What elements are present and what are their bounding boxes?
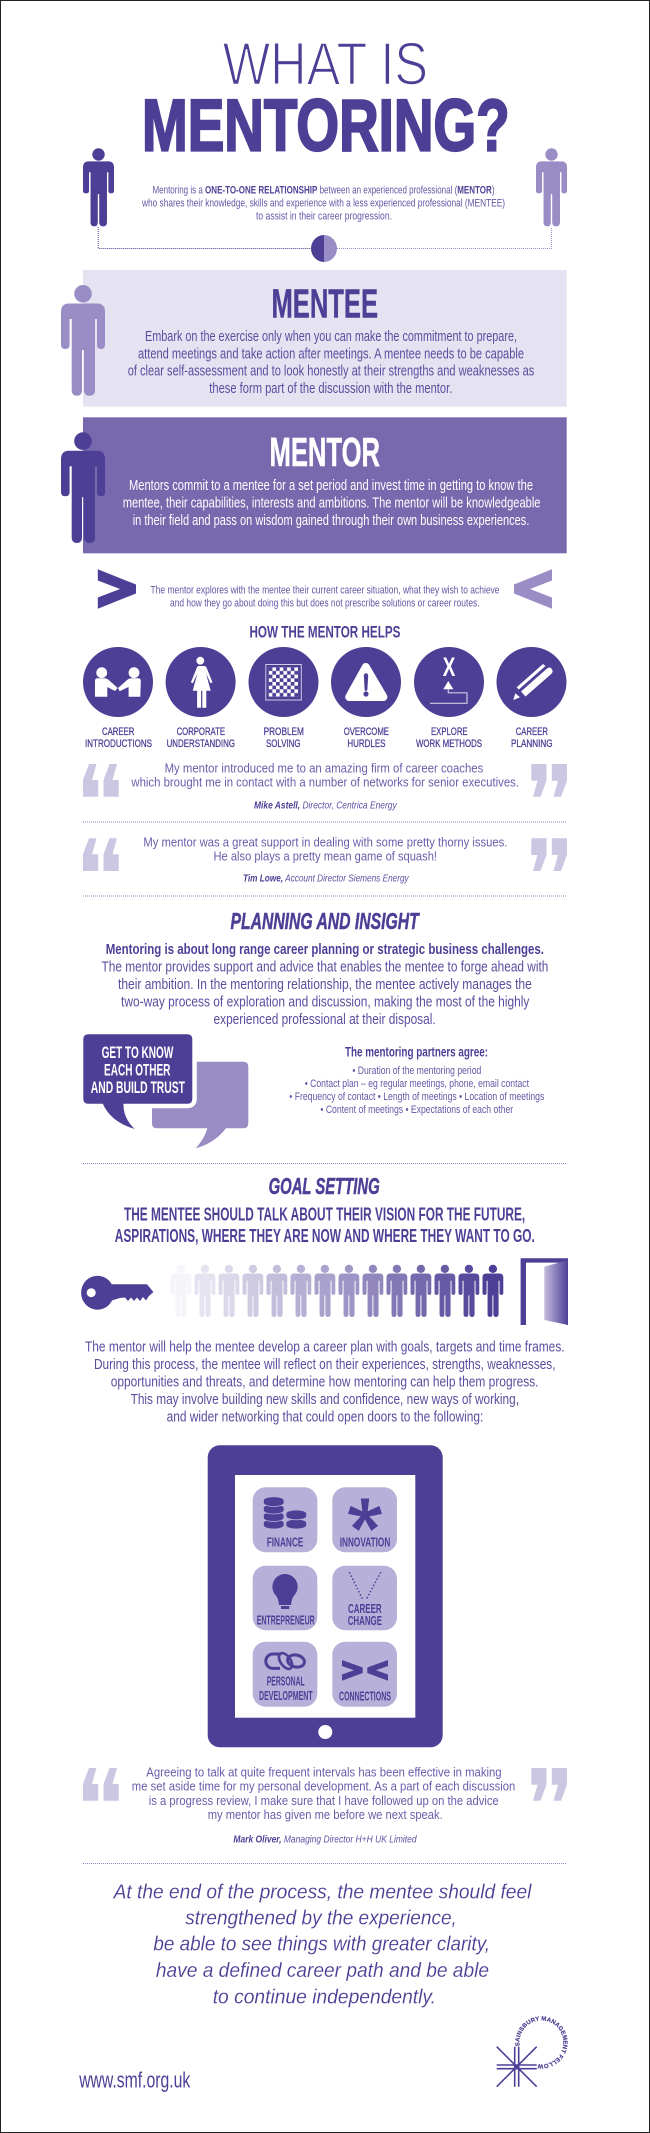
icon: corporate understanding bbox=[166, 647, 236, 717]
quote: Mike Astell: Mike Astell, Director, Centrica Energy bbox=[254, 800, 397, 812]
planning body text: two-way process of exploration and discussion, making the most of the highly bbox=[121, 994, 530, 1011]
goal setting body text: opportunities and threats, and determine how mentoring can help them progress. bbox=[111, 1374, 538, 1391]
labels under mentor help icons: EXPLORE bbox=[431, 726, 468, 738]
figure: mentee small bbox=[536, 148, 567, 226]
mentoring partners agree list: • Frequency of contact • Length of meetings • Location of meetings bbox=[289, 1091, 545, 1103]
tile: career change: CAREER bbox=[348, 1602, 382, 1616]
logo: sainsbury management fellows: SAINSBURY MANAGEMENT FELLOWS bbox=[515, 2016, 568, 2069]
tile: personal development: PERSONAL bbox=[267, 1675, 305, 1689]
explore text: The mentor explores with the mentee their current career situation, what they wish to achieve bbox=[150, 584, 500, 596]
chevron left bbox=[514, 569, 552, 609]
quote: Mark Oliver: me set aside time for my personal development. As a part of each discussion bbox=[132, 1780, 515, 1794]
icon: explore work methods: X bbox=[443, 652, 455, 682]
quote: Tim Lowe bbox=[83, 836, 567, 885]
mentoring partners agree list: The mentoring partners agree: bbox=[345, 1045, 488, 1060]
heading: planning and insight: PLANNING AND INSIGHT bbox=[230, 908, 420, 934]
quote: Mike Astell: My mentor introduced me to an amazing firm of career coaches bbox=[165, 762, 483, 776]
mentoring partners agree list: • Content of meetings • Expectations of each other bbox=[320, 1104, 513, 1116]
heading: how the mentor helps: HOW THE MENTOR HELPS bbox=[250, 623, 400, 642]
tile: finance: FINANCE bbox=[267, 1535, 303, 1549]
closing statement: have a defined career path and be able bbox=[156, 1959, 489, 1982]
quote: Mark Oliver: Agreeing to talk at quite frequent intervals has been effective in making bbox=[146, 1766, 502, 1780]
mentoring partners agree list: • Duration of the mentoring period bbox=[352, 1065, 481, 1077]
tile: innovation: INNOVATION bbox=[340, 1535, 390, 1549]
intro text bbox=[141, 184, 505, 222]
mentor heading: MENTOR bbox=[270, 429, 380, 475]
mentee body text: these form part of the discussion with the mentor. bbox=[209, 380, 452, 397]
speech bubbles: GET TO KNOW bbox=[102, 1043, 174, 1062]
icon: key bbox=[81, 1276, 153, 1310]
labels under mentor help icons bbox=[85, 726, 553, 750]
tile: personal development: DEVELOPMENT bbox=[259, 1689, 313, 1703]
figure: mentee large bbox=[61, 285, 105, 396]
tile: career change bbox=[332, 1566, 397, 1630]
labels under mentor help icons: CAREER bbox=[102, 726, 134, 738]
panel: mentee bbox=[83, 270, 567, 407]
intro text: who shares their knowledge, skills and experience with a less experienced professional (MENTEE) bbox=[141, 198, 505, 210]
heading: goal setting: GOAL SETTING bbox=[269, 1173, 380, 1199]
website url: www.smf.org.uk bbox=[78, 2067, 191, 2092]
figure: mentor small bbox=[83, 148, 114, 226]
speech bubbles bbox=[83, 1034, 248, 1148]
goal setting body text: This may involve building new skills and confidence, new ways of working, bbox=[131, 1391, 519, 1408]
quote: Mark Oliver: my mentor has given me before we next speak. bbox=[208, 1808, 443, 1822]
labels under mentor help icons: PLANNING bbox=[511, 738, 553, 750]
tile: entrepreneur: ENTREPRENEUR bbox=[257, 1614, 315, 1628]
title: mentoring: MENTORING? bbox=[142, 86, 510, 167]
mentor body text bbox=[123, 477, 540, 529]
closing statement bbox=[112, 1880, 533, 2008]
quote: Tim Lowe: Tim Lowe, Account Director Siemens Energy bbox=[243, 873, 409, 885]
labels under mentor help icons: OVERCOME bbox=[344, 726, 389, 738]
icon: career introductions bbox=[83, 647, 153, 717]
closing statement: At the end of the process, the mentee should feel bbox=[112, 1880, 533, 1903]
tablet with opportunity tiles bbox=[208, 1445, 443, 1747]
planning body text: The mentor provides support and advice that enables the mentee to forge ahead with bbox=[102, 959, 548, 976]
figure: mentor large bbox=[61, 432, 105, 543]
labels under mentor help icons: SOLVING bbox=[266, 738, 300, 750]
intro text: Mentoring is a ONE-TO-ONE RELATIONSHIP between an experienced professional (MENTOR) bbox=[152, 184, 494, 196]
quote: Mark Oliver: is a progress review, I make sure that I have followed up on the advice bbox=[149, 1794, 499, 1808]
speech bubbles: AND BUILD TRUST bbox=[91, 1078, 185, 1097]
planning body text: their ambition. In the mentoring relationship, the mentee actively manages the bbox=[118, 976, 532, 993]
mentee body text: attend meetings and take action after meetings. A mentee needs to be capable bbox=[138, 345, 524, 362]
labels under mentor help icons: PROBLEM bbox=[264, 726, 304, 738]
labels under mentor help icons: INTRODUCTIONS bbox=[85, 738, 152, 750]
labels under mentor help icons: UNDERSTANDING bbox=[167, 738, 235, 750]
planning body text: experienced professional at their disposal. bbox=[214, 1011, 436, 1028]
tile: entrepreneur bbox=[253, 1566, 317, 1630]
quote: Tim Lowe: He also plays a pretty mean game of squash! bbox=[214, 850, 437, 864]
icon: problem solving bbox=[248, 647, 318, 717]
mentee heading: MENTEE bbox=[272, 280, 378, 326]
mentee body text bbox=[128, 328, 534, 397]
quote: Mark Oliver bbox=[83, 1766, 567, 1846]
tile: innovation bbox=[332, 1487, 397, 1552]
tile: connections: CONNECTIONS bbox=[339, 1690, 391, 1704]
speech bubbles: EACH OTHER bbox=[104, 1061, 170, 1080]
mentoring partners agree list: • Contact plan – eg regular meetings, phone, email contact bbox=[305, 1078, 529, 1090]
intro text: to assist in their career progression. bbox=[256, 210, 392, 222]
icon: career planning bbox=[496, 647, 566, 717]
goal setting body text bbox=[85, 1339, 565, 1425]
labels under mentor help icons: HURDLES bbox=[347, 738, 386, 750]
goal setting body text: and wider networking that could open doors to the following: bbox=[167, 1408, 483, 1425]
closing statement: strengthened by the experience, bbox=[185, 1907, 457, 1930]
tile: personal development bbox=[253, 1642, 317, 1707]
icon: explore work methods bbox=[414, 647, 484, 717]
panel: mentor bbox=[83, 417, 567, 553]
connector between mentor and mentee bbox=[98, 227, 551, 262]
closing statement: to continue independently. bbox=[213, 1985, 436, 2008]
tile: connections bbox=[332, 1642, 397, 1707]
goal setting subheading bbox=[115, 1204, 535, 1246]
labels under mentor help icons: CAREER bbox=[516, 726, 548, 738]
row of figures fading in bbox=[170, 1265, 503, 1317]
mentoring partners agree list bbox=[289, 1045, 545, 1116]
title: what is: WHAT IS bbox=[223, 30, 428, 98]
tile: finance bbox=[253, 1487, 317, 1552]
tile: career change: CHANGE bbox=[348, 1614, 382, 1628]
icon: overcome hurdles bbox=[331, 647, 401, 717]
mentee body text: Embark on the exercise only when you can make the commitment to prepare, bbox=[145, 328, 517, 345]
chevron right bbox=[98, 569, 136, 609]
explore text bbox=[150, 584, 500, 610]
explore text: and how they go about doing this but does not prescribe solutions or career routes. bbox=[170, 598, 480, 610]
labels under mentor help icons: WORK METHODS bbox=[416, 738, 482, 750]
quote: Mark Oliver: Mark Oliver, Managing Director H+H UK Limited bbox=[233, 1834, 418, 1846]
closing statement: be able to see things with greater clarity, bbox=[153, 1933, 490, 1956]
labels under mentor help icons: CORPORATE bbox=[177, 726, 225, 738]
quote: Mike Astell bbox=[83, 762, 567, 812]
icon: open door bbox=[521, 1258, 568, 1325]
quote: Mike Astell: which brought me in contact with a number of networks for senior executives. bbox=[130, 776, 519, 790]
quote: Tim Lowe: My mentor was a great support in dealing with some pretty thorny issues. bbox=[143, 836, 507, 850]
planning body text bbox=[102, 941, 548, 1028]
